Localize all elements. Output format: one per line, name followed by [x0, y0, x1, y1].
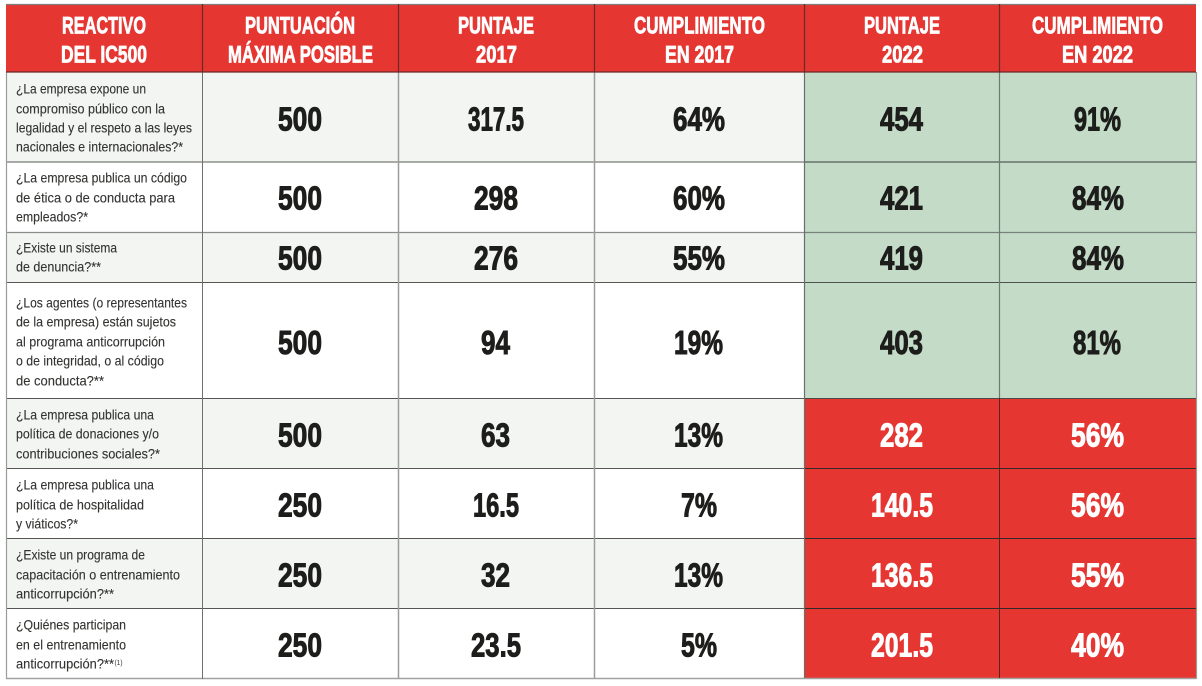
header: puntaje 2017: 2017	[476, 42, 517, 69]
row 4: 94	[481, 324, 511, 361]
row 7: 55%	[1071, 556, 1124, 594]
header: puntaje 2022: PUNTAJE	[864, 13, 940, 40]
row 8: 23.5	[471, 626, 521, 664]
header: puntuación máxima: MÁXIMA POSIBLE	[228, 41, 373, 69]
header: reactivo	[61, 13, 147, 69]
row 8: 250	[278, 626, 322, 664]
row 5: 500	[278, 416, 322, 454]
row 6: 140.5	[871, 486, 933, 524]
row 3: 276	[474, 240, 518, 276]
row 2: 500	[278, 180, 322, 216]
row 8: 5%	[681, 626, 717, 664]
question 3: ¿Existe un sistema	[16, 240, 117, 256]
question 2: empleados?*	[16, 209, 88, 225]
row 1: 454	[880, 100, 924, 138]
question 1: legalidad y el respeto a las leyes	[16, 120, 192, 136]
question 4: ¿Los agentes (o representantes	[16, 295, 187, 311]
question 3: de denuncia?**	[16, 259, 101, 275]
question 2: ¿La empresa publica un código	[16, 170, 187, 186]
row 1: 500	[278, 100, 322, 138]
row 2	[16, 170, 1124, 225]
header: cumplimiento 2022	[1032, 13, 1163, 69]
row 7: 13%	[674, 556, 723, 594]
row 4: 403	[880, 324, 923, 361]
question 8: en el entrenamiento	[16, 637, 126, 653]
header: cumplimiento 2017: EN 2017	[665, 42, 734, 69]
question 2: de ética o de conducta para	[16, 190, 175, 206]
question 4: al programa anticorrupción	[16, 334, 165, 350]
row 2: 421	[880, 180, 923, 216]
row 7: 250	[278, 556, 322, 594]
question 7	[16, 547, 180, 602]
row 6	[16, 477, 1124, 532]
question 7: ¿Existe un programa de	[16, 547, 145, 563]
question 1	[16, 81, 192, 155]
question 6: ¿La empresa publica una	[16, 477, 154, 493]
row 8	[16, 617, 1124, 672]
question 7: anticorrupción?**	[16, 586, 115, 602]
header: puntaje 2022	[864, 13, 940, 69]
question 4	[16, 295, 187, 389]
row 4	[16, 295, 1121, 389]
row 3: 55%	[673, 240, 725, 276]
row 2: 60%	[673, 180, 725, 216]
header: puntaje 2022: 2022	[882, 42, 923, 69]
question 6	[16, 477, 154, 532]
question 7: capacitación o entrenamiento	[16, 567, 180, 583]
row 3: 84%	[1072, 240, 1124, 276]
question 6: política de hospitalidad	[16, 497, 144, 513]
question 8: ¿Quiénes participan	[16, 617, 126, 633]
row 1: 91%	[1074, 100, 1121, 138]
header row	[6, 4, 1196, 72]
question 1: compromiso público con la	[16, 101, 165, 117]
row 6: 250	[278, 486, 322, 524]
question 8	[16, 617, 126, 672]
row 7: 136.5	[871, 556, 933, 594]
question 8: (1)	[114, 660, 122, 667]
row 8: 201.5	[871, 626, 933, 664]
question 5: ¿La empresa publica una	[16, 407, 154, 423]
row 5: 56%	[1071, 416, 1124, 454]
row 1: 64%	[673, 100, 725, 138]
row 8: 40%	[1071, 626, 1124, 664]
row 3: 500	[278, 240, 322, 276]
header: puntuación máxima	[228, 12, 373, 69]
question 8: anticorrupción?**	[16, 656, 115, 672]
row 2: 298	[474, 180, 518, 216]
row 1	[16, 81, 1121, 155]
row 6: 7%	[681, 486, 717, 524]
row 4: 19%	[674, 324, 723, 361]
header: cumplimiento 2022: EN 2022	[1062, 42, 1133, 69]
row 6: 56%	[1071, 486, 1124, 524]
header: puntaje 2017: PUNTAJE	[458, 13, 534, 40]
question 1: nacionales e internacionales?*	[16, 139, 183, 155]
row 4: 500	[278, 324, 322, 361]
question 5: contribuciones sociales?*	[16, 446, 160, 462]
question 1: ¿La empresa expone un	[16, 81, 146, 97]
question 4: de la empresa) están sujetos	[16, 314, 176, 330]
row 1: 317.5	[468, 100, 524, 138]
header: cumplimiento 2017: CUMPLIMIENTO	[634, 13, 765, 40]
question 5	[16, 407, 160, 462]
header: puntaje 2017	[458, 13, 534, 69]
row 5: 282	[880, 416, 923, 454]
header: reactivo: DEL IC500	[61, 42, 147, 69]
row 6: 16.5	[473, 486, 519, 524]
question 5: política de donaciones y/o	[16, 426, 159, 442]
question 3	[16, 240, 117, 275]
header: puntuación máxima: PUNTUACIÓN	[245, 12, 355, 40]
row 3	[16, 240, 1124, 276]
header: reactivo: REACTIVO	[62, 13, 146, 40]
question 4: o de integridad, o al código	[16, 353, 164, 369]
row 5	[16, 407, 1124, 462]
row 7	[16, 547, 1124, 602]
row 7: 32	[481, 556, 510, 594]
question 2	[16, 170, 187, 225]
question 4: de conducta?**	[16, 373, 105, 389]
row 3: 419	[880, 240, 923, 276]
row 4: 81%	[1073, 324, 1121, 361]
question 6: y viáticos?*	[16, 516, 78, 532]
row 5: 13%	[674, 416, 723, 454]
header: cumplimiento 2017	[634, 13, 765, 69]
row 5: 63	[481, 416, 510, 454]
row 2: 84%	[1072, 180, 1124, 216]
